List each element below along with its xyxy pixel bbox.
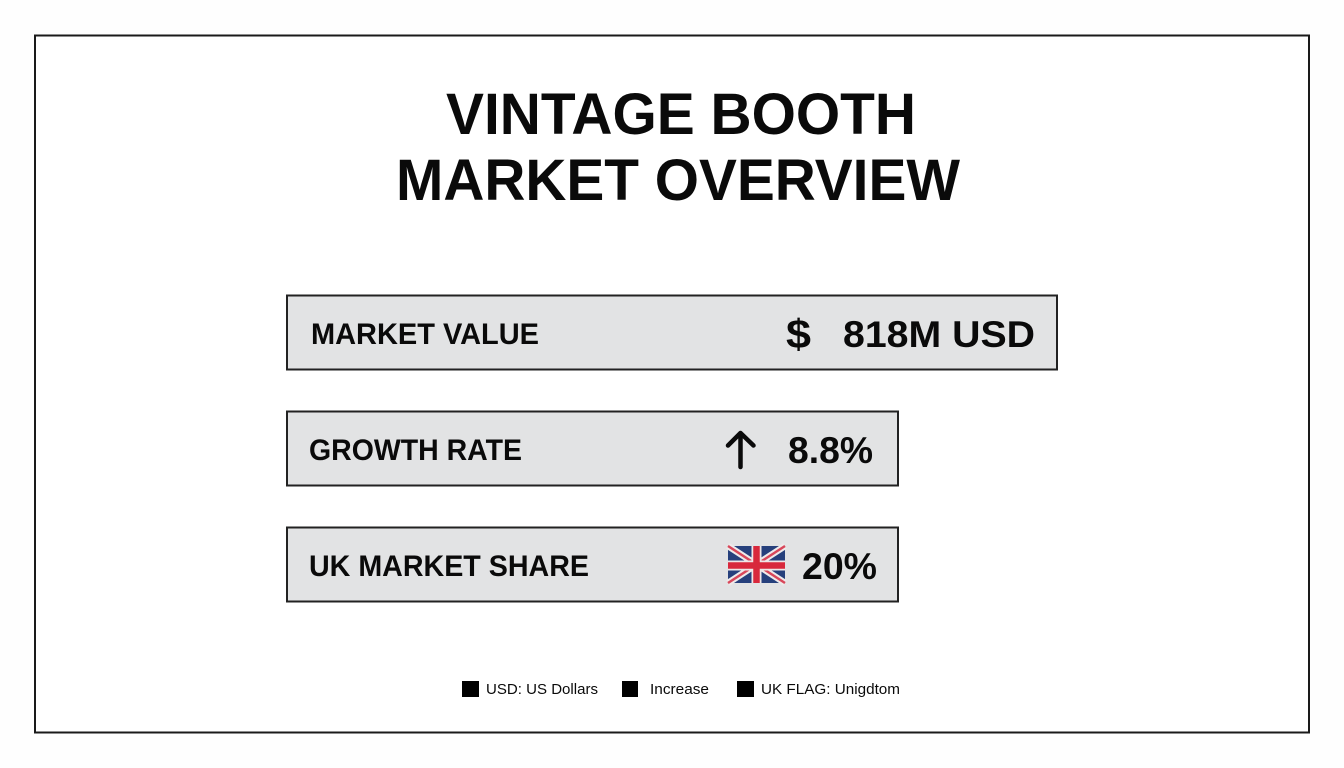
label: uk market share: UK MARKET SHARE — [309, 550, 589, 583]
value: 20%: 20% — [802, 546, 877, 587]
legend item: uk flag: UK FLAG: Unigdtom — [761, 681, 900, 698]
title: VINTAGE BOOTH — [446, 82, 916, 147]
title — [396, 82, 960, 213]
legend item: usd: USD: US Dollars — [486, 681, 598, 698]
value: 8.8%: 8.8% — [788, 430, 873, 471]
icon: uk flag — [728, 546, 785, 583]
label: growth rate: GROWTH RATE — [309, 434, 522, 467]
title: MARKET OVERVIEW — [396, 148, 960, 213]
legend — [462, 681, 900, 698]
panel: growth rate — [287, 412, 898, 486]
icon: dollar sign: $ — [786, 311, 811, 357]
label: market value: MARKET VALUE — [311, 318, 539, 351]
icon: up arrow — [728, 433, 754, 467]
panel: uk market share — [287, 528, 898, 602]
legend item: increase: Increase — [650, 681, 709, 698]
panel: market value — [287, 296, 1057, 370]
value: 818M USD: 818M USD — [843, 314, 1035, 355]
legend item: increase — [622, 681, 709, 698]
